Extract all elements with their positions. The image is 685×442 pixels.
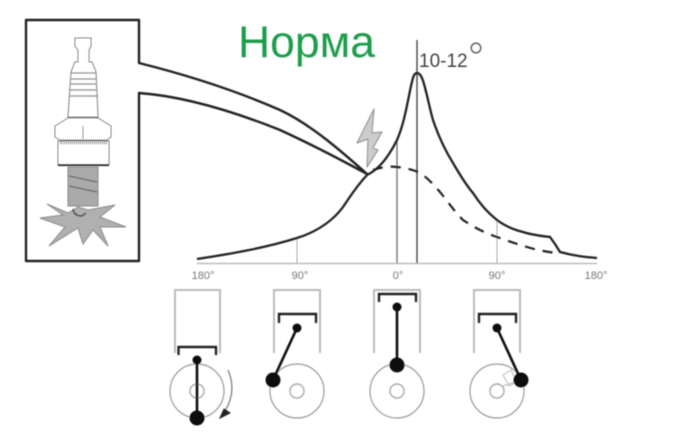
piston: 90 after (470, 290, 528, 418)
compression-only dashed curve (373, 167, 557, 253)
callout frame (26, 20, 367, 261)
title: Норма (238, 18, 375, 67)
piston diagrams (170, 290, 528, 426)
pressure chart (197, 40, 597, 264)
rotation arrow (225, 370, 232, 411)
callout box with spark plug (26, 20, 367, 261)
crank angle labels: 180° (585, 270, 607, 282)
crank angle labels: 180° (192, 270, 214, 282)
peak angle label: 10-12 (419, 51, 468, 72)
combustion pressure curve (197, 73, 597, 259)
crank angle labels: 90° (292, 270, 308, 282)
baseline axis (197, 262, 597, 264)
crank angle labels (192, 270, 607, 282)
lightning icon (357, 109, 382, 167)
vertical markers (297, 40, 497, 263)
peak angle label (419, 43, 481, 72)
spark plug (40, 38, 126, 246)
crank angle labels: 0° (393, 270, 403, 282)
piston: 0 (370, 290, 424, 418)
spark burst (40, 204, 126, 246)
crank angle labels: 90° (489, 270, 505, 282)
degree mark (471, 43, 481, 53)
piston: 90 before (266, 290, 324, 418)
piston: 180 (170, 290, 232, 426)
